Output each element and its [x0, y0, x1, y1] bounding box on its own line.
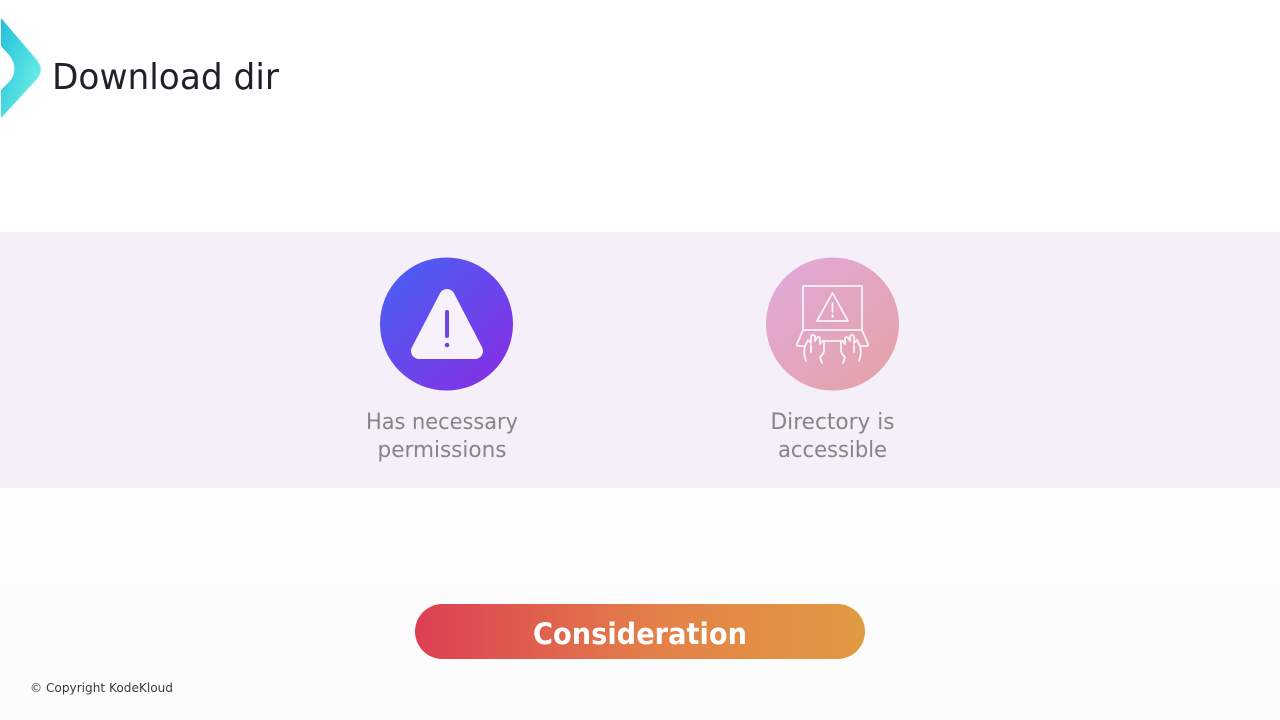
title: Download dir: [52, 57, 279, 98]
copyright footer: © Copyright KodeKloud: [30, 680, 173, 695]
label: directory is accessible: Directory is: [770, 410, 894, 435]
logo chevron: [1, 18, 41, 118]
icon: laptop with warning and hands: [766, 258, 899, 390]
icon: warning triangle: [380, 258, 513, 390]
consideration pill button: Consideration: [533, 617, 747, 651]
panel: requirements band: [0, 232, 1280, 488]
label: has necessary permissions: Has necessary: [366, 410, 518, 435]
label: has necessary permissions: [366, 410, 518, 463]
label: has necessary permissions: permissions: [378, 438, 506, 463]
label: directory is accessible: accessible: [778, 438, 887, 463]
consideration pill button: [415, 604, 865, 659]
label: directory is accessible: [770, 410, 894, 463]
